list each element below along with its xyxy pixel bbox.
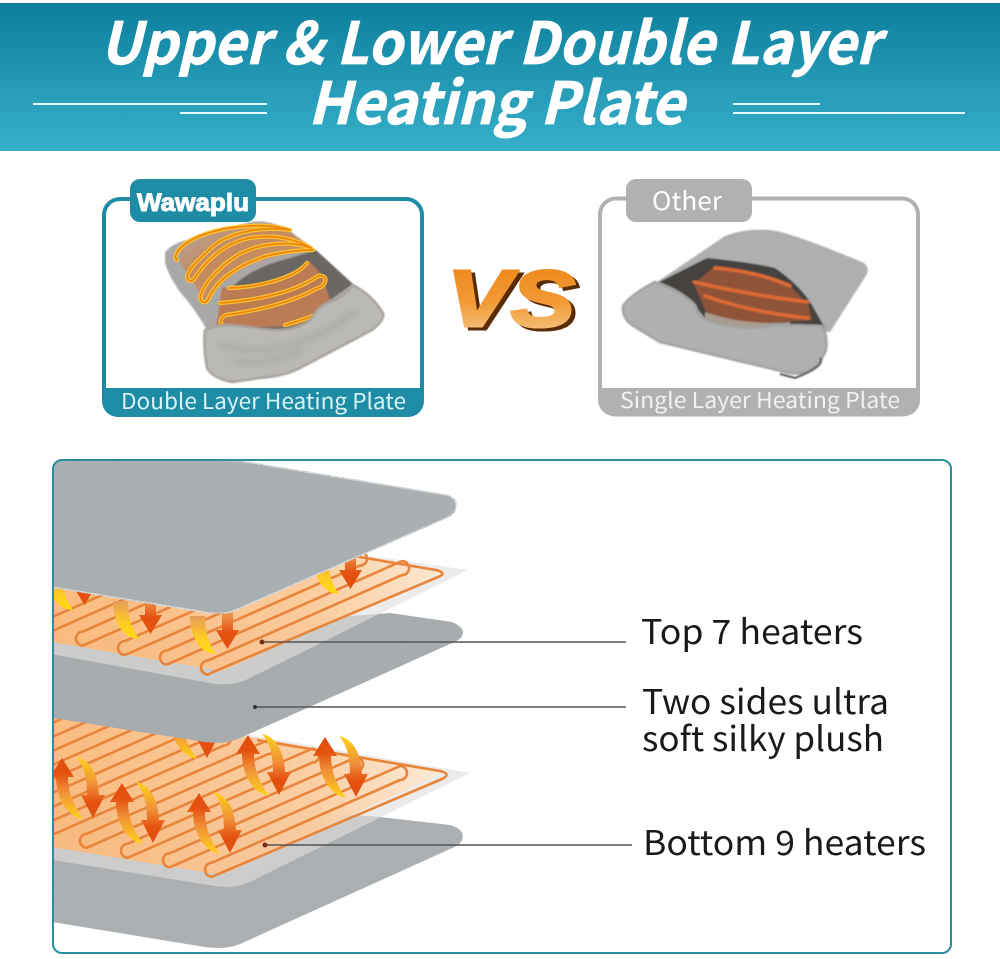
lower heater sheet [54, 718, 470, 887]
label line 1: Two sides ultra [642, 675, 889, 724]
icon: VS emblem: VS [447, 254, 575, 343]
icon: heating pad with single layer coils [623, 230, 868, 378]
label line 2: soft silky plush [642, 712, 884, 761]
label: Bottom 9 heaters [643, 816, 926, 865]
panel frame [53, 460, 951, 953]
heat arrows lower [54, 734, 368, 854]
label: Top 7 heaters [641, 605, 863, 654]
caption band [598, 388, 920, 416]
panel frame [104, 199, 422, 415]
decorative lines right [733, 104, 965, 113]
panel: layer diagram [34, 455, 951, 953]
brand tab [130, 179, 256, 222]
heat arrows upper [47, 550, 362, 654]
callout: top heaters [260, 605, 863, 654]
icon: VS emblem: VS [451, 257, 579, 346]
callout: bottom heaters [262, 816, 926, 865]
decorative lines left [33, 104, 267, 113]
callout: plush [253, 675, 889, 761]
header banner [0, 0, 1000, 151]
label text: Other [652, 182, 722, 218]
exploded layers illustration [34, 455, 470, 948]
caption: Double Layer Heating Plate [121, 384, 406, 416]
bottom plush layer [54, 814, 463, 948]
upper heater sheet [54, 554, 468, 684]
caption: Single Layer Heating Plate [620, 383, 900, 415]
panel: other single layer [598, 179, 920, 416]
panel: Wawaplu double layer [102, 179, 424, 417]
title line 2: Heating Plate [308, 57, 688, 141]
panel frame [600, 198, 918, 414]
middle plush layer [40, 613, 463, 743]
brand name: Wawaplu [137, 189, 249, 217]
caption band [102, 388, 424, 417]
top plush layer [40, 455, 456, 613]
icon: heating pad with double layer coils [165, 221, 383, 382]
label tab [626, 179, 752, 222]
